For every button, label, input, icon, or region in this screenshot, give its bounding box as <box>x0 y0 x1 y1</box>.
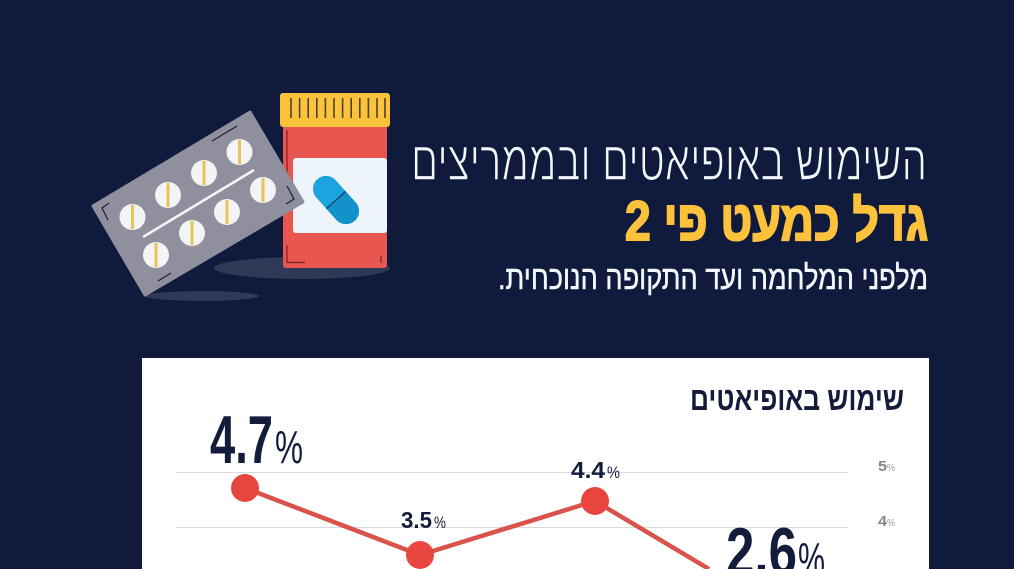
panel: opiates chart <box>142 358 929 569</box>
icon: pill bottle <box>280 93 390 268</box>
axis label: 4%: 4 <box>878 513 888 530</box>
subtitle: מלפני המלחמה ועד התקופה הנוכחית. <box>498 259 928 296</box>
icon: blister shadow <box>145 291 259 301</box>
value label: 3.5%: % <box>434 513 446 532</box>
value label: 4.7%: % <box>275 421 303 473</box>
icon: blister pack <box>93 112 303 295</box>
value label: 4.7%: 4.7 <box>210 402 273 478</box>
value label: 4.4%: 4.4 <box>571 457 605 483</box>
axis label: 4% <box>878 513 895 530</box>
axis label: 5%: 5 <box>878 458 887 475</box>
axis label: 5%: % <box>887 463 895 474</box>
value label: 3.5%: 3.5 <box>401 507 432 533</box>
illustration: medication <box>93 93 390 301</box>
title line 2: highlight: גדל כמעט פי 2 <box>625 189 928 252</box>
line chart: series <box>231 474 709 569</box>
chart heading: שימוש באופיאטים <box>690 380 904 417</box>
value label: 4.4%: % <box>607 463 620 482</box>
icon: bottle shadow <box>214 257 390 279</box>
axis label: 5% <box>878 458 895 475</box>
value label: 4.4% <box>571 457 620 483</box>
axis label: 4%: % <box>887 518 895 529</box>
